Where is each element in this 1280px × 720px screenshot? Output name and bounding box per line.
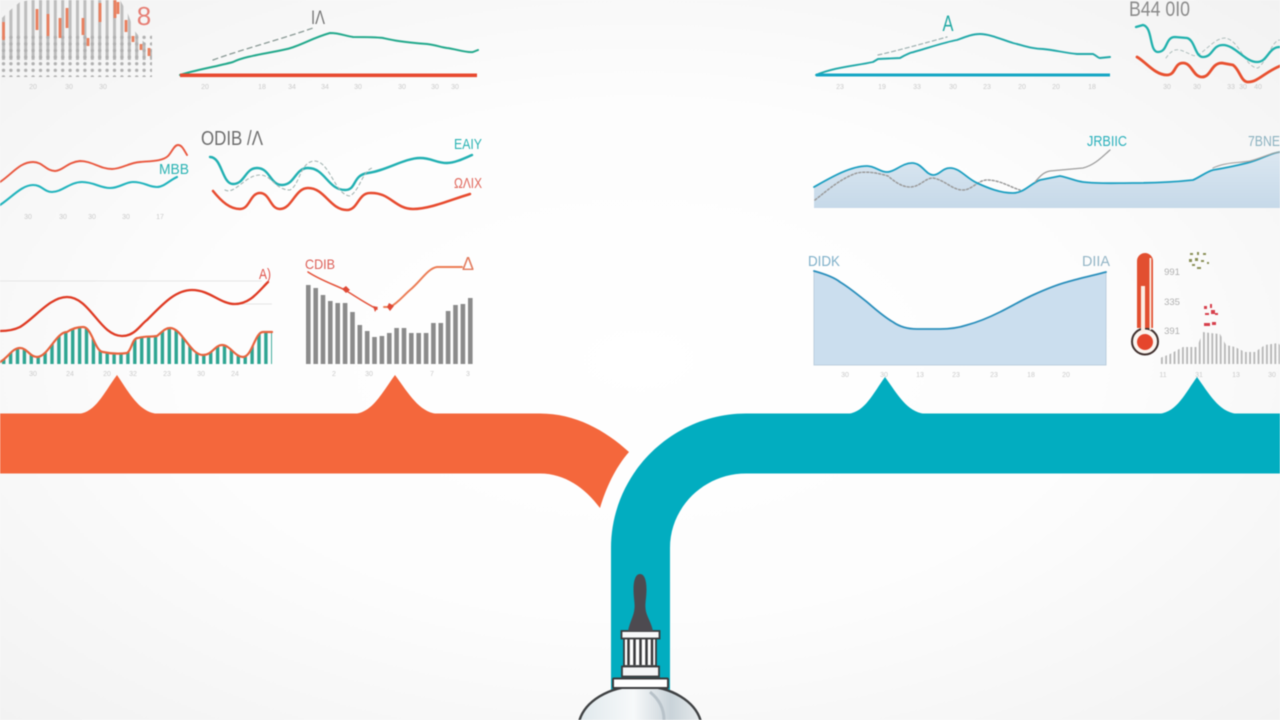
blue line [814, 152, 1280, 193]
axis ticks: 18 [1088, 84, 1096, 91]
orange branch arrow [0, 414, 629, 508]
teal pointer right [1156, 377, 1240, 414]
axis ticks: 20 [103, 371, 111, 378]
bulb core [1137, 334, 1153, 350]
icon: capitol dome [579, 574, 701, 720]
drum backing [624, 638, 656, 666]
left label: DIDK [808, 253, 840, 270]
teal branch arrow [611, 414, 1280, 700]
blue line [814, 271, 1106, 329]
red line [0, 145, 187, 182]
axis ticks: 23 [983, 84, 991, 91]
triangle label: Δ [462, 254, 474, 274]
red label: ΩΛΙΧ [454, 175, 482, 192]
panel: wave chart mid left [201, 128, 482, 210]
axis ticks: 23 [836, 84, 844, 91]
area fill [814, 152, 1280, 208]
axis ticks: 34 [321, 84, 329, 91]
axis ticks: 30 [29, 371, 37, 378]
panel: two line chart mid left [0, 145, 189, 221]
label: ΙΛ [311, 8, 325, 29]
teal label: A [942, 11, 954, 36]
axis ticks: 18 [1027, 372, 1035, 379]
panel: area chart mid right [814, 133, 1280, 208]
red dots cluster [1204, 304, 1218, 326]
dome base ring [613, 678, 668, 688]
right label: DIIA [1082, 253, 1110, 270]
icon: thermometer [1132, 253, 1158, 354]
blue baseline [816, 74, 1110, 76]
axis ticks: 30 [354, 84, 362, 91]
axis ticks: 30 [451, 84, 459, 91]
panel: blue area chart lower right [808, 253, 1110, 379]
axis ticks: 20 [1052, 84, 1060, 91]
label: 8 [137, 1, 151, 31]
axis ticks: 19 [878, 84, 886, 91]
teal line [1136, 25, 1280, 62]
panel: thermometer and small bars lower right [1132, 252, 1280, 379]
axis ticks: 20 [1062, 372, 1070, 379]
area fill [814, 271, 1106, 365]
red label: CDIB [305, 256, 335, 272]
teal line [210, 155, 472, 190]
gray upper bars [0, 0, 152, 60]
axis ticks: 30 [197, 371, 205, 378]
axis ticks: 11 [1159, 372, 1167, 379]
teal line [0, 177, 177, 205]
axis ticks: 40 [1254, 84, 1262, 91]
bulb outer ring [1132, 328, 1158, 354]
stem [1137, 253, 1153, 328]
orange trend line left [308, 272, 377, 309]
green line [180, 33, 478, 75]
axis ticks: 33 [913, 84, 921, 91]
dot grid [0, 34, 152, 77]
axis ticks: 30 [1193, 84, 1201, 91]
orange pointer left [76, 375, 160, 414]
red line [213, 188, 470, 210]
orange envelope line [0, 327, 272, 362]
axis ticks: 23 [952, 372, 960, 379]
axis ticks: 30 [949, 84, 957, 91]
axis ticks: 30 [1163, 84, 1171, 91]
scale labels: 335 [1164, 297, 1180, 308]
axis ticks: 23 [163, 371, 171, 378]
axis ticks: 7 [430, 371, 434, 378]
dome highlight [650, 692, 664, 720]
teal line [816, 34, 1110, 75]
axis ticks: 30 [99, 84, 107, 91]
axis ticks: 20 [1018, 84, 1026, 91]
teal pointer left [845, 377, 928, 414]
axis ticks: 24 [66, 371, 74, 378]
axis ticks: 24 [231, 371, 239, 378]
panel: wave chart top right [1129, 0, 1280, 91]
dashed series [225, 161, 372, 196]
axis ticks: 30 [841, 372, 849, 379]
chart title: ODIB /Λ [201, 128, 264, 150]
axis ticks: 30 [88, 214, 96, 221]
coloured bar segments [4, 0, 149, 56]
channel [1141, 258, 1151, 332]
gray dotted series [815, 172, 1020, 200]
axis ticks: 33 [1227, 84, 1235, 91]
axis ticks: 30 [122, 214, 130, 221]
panel: line and bar chart lower left [0, 266, 272, 378]
axis ticks: 30 [65, 84, 73, 91]
gray upper right line [1213, 152, 1280, 168]
axis ticks: 3 [466, 371, 470, 378]
teal label: MBB [159, 161, 189, 178]
drum collar [622, 666, 659, 676]
scale labels: 391 [1164, 326, 1180, 337]
panel: green line chart top left [180, 8, 478, 91]
red line [1137, 57, 1280, 82]
dome body [579, 686, 701, 720]
dashed series [213, 28, 313, 60]
orange trend line right [384, 267, 462, 307]
axis ticks: 30 [1268, 372, 1276, 379]
dashed series [1166, 38, 1280, 68]
axis ticks: 30 [880, 372, 888, 379]
red line [0, 282, 268, 336]
axis ticks: 30 [24, 214, 32, 221]
thin gray bars [1160, 332, 1280, 364]
green bars [0, 327, 272, 364]
panel: gray bar chart lower left [305, 254, 474, 378]
axis ticks: 17 [156, 214, 164, 221]
axis ticks: 20 [201, 84, 209, 91]
axis ticks: 18 [258, 84, 266, 91]
axis ticks: 13 [916, 372, 924, 379]
drum columns [624, 638, 656, 666]
panel: teal line chart top right [816, 11, 1110, 91]
orange pointer right [352, 375, 440, 414]
axis ticks: 30 [59, 214, 67, 221]
scale labels: 991 [1164, 267, 1180, 278]
axis ticks: 31 [1195, 372, 1203, 379]
axis ticks: 23 [990, 372, 998, 379]
drum cap [622, 631, 660, 638]
axis ticks: 2 [332, 371, 336, 378]
red baseline [180, 74, 477, 77]
statue finial [628, 574, 653, 631]
gray rising line [1035, 150, 1110, 182]
panel: dotted bar chart top left [0, 0, 152, 91]
axis ticks: 13 [1232, 372, 1240, 379]
markers [342, 286, 394, 312]
red label: A) [259, 266, 271, 283]
axis ticks: 20 [29, 84, 37, 91]
axis ticks: 30 [398, 84, 406, 91]
axis ticks: 32 [129, 371, 137, 378]
axis ticks: 30 [365, 371, 373, 378]
olive dots cluster [1189, 252, 1209, 269]
teal label: EAIY [454, 136, 482, 153]
gray bars [306, 285, 473, 364]
teal label: JRBIIC [1087, 133, 1127, 150]
axis ticks: 30 [1239, 84, 1247, 91]
guide lines [0, 281, 272, 304]
column strokes [628, 639, 652, 665]
axis ticks: 34 [288, 84, 296, 91]
dashed series [878, 37, 947, 55]
axis ticks: 30 [431, 84, 439, 91]
